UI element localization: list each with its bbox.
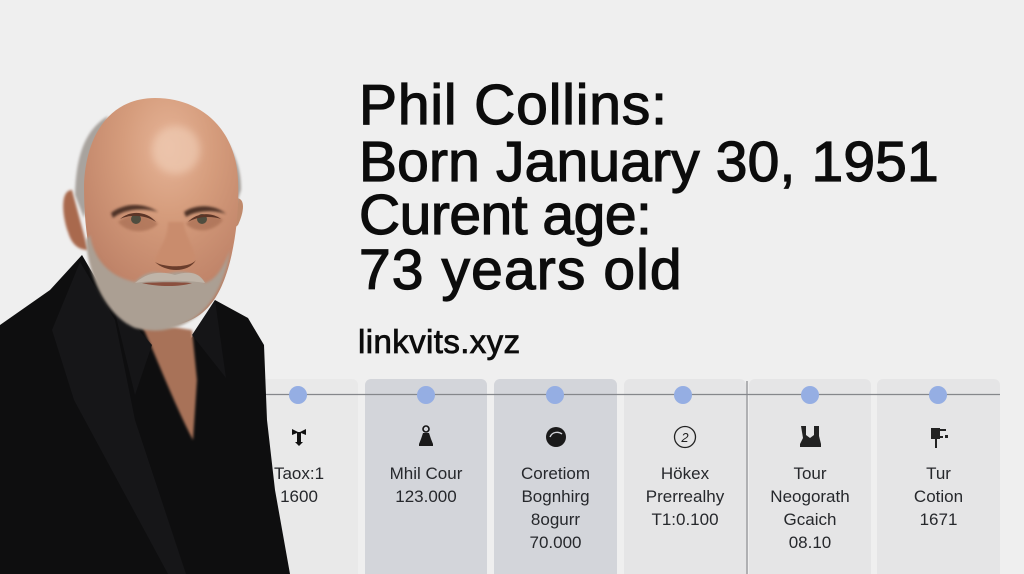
nose	[155, 222, 195, 270]
card 2 text	[390, 464, 462, 506]
nose shadow	[155, 260, 196, 270]
card 5	[749, 379, 871, 574]
card 3 text: 70.000	[530, 533, 582, 552]
eyes	[131, 214, 141, 224]
hair sides	[75, 116, 241, 218]
icon: bell figure	[419, 425, 433, 446]
card 5 text: Tour	[793, 464, 827, 483]
portrait of Phil Collins	[0, 98, 290, 574]
icon: arrows	[292, 429, 306, 446]
head	[84, 98, 238, 326]
card 6 text	[914, 464, 963, 529]
card 5 text: 08.10	[789, 533, 831, 552]
card 6 text: Tur	[926, 464, 951, 483]
card 3 text: Coretiom	[521, 464, 590, 483]
card 2	[365, 379, 487, 574]
card 4 text: Hökex	[661, 464, 709, 483]
forehead highlight	[152, 126, 200, 174]
card 1 text: 1600	[280, 487, 318, 506]
eyelids	[120, 213, 221, 222]
moustache	[135, 273, 205, 283]
card 1 text	[274, 464, 324, 506]
card 3 text: Bognhirg	[521, 487, 590, 506]
icon: circled number	[674, 426, 696, 448]
ears	[63, 190, 88, 250]
timeline panel	[274, 379, 1000, 574]
beard	[86, 235, 230, 331]
icon: flag	[931, 428, 948, 448]
card 2 text: Mhil Cour	[390, 464, 462, 483]
lapel	[52, 262, 186, 574]
card 5 text	[770, 464, 850, 552]
card 4	[624, 379, 746, 574]
card 5 text: Gcaich	[784, 510, 836, 529]
card 3 text	[521, 464, 590, 552]
card 4 text	[646, 464, 724, 529]
shirt collar	[112, 300, 226, 395]
title: Phil Collins:	[359, 73, 668, 137]
icon: round blob	[546, 427, 566, 447]
title	[359, 73, 939, 302]
icon: hands	[800, 426, 821, 447]
card 6 text: 1671	[920, 510, 957, 529]
card 3	[494, 379, 617, 574]
card 4 text: Prerrealhy	[646, 487, 724, 506]
website label: linkvits.xyz	[358, 323, 520, 360]
black jacket	[0, 255, 290, 574]
title: Curent age:	[359, 183, 651, 247]
card 3 text: 8ogurr	[531, 510, 580, 529]
title: 73 years old	[359, 238, 683, 302]
brows	[111, 205, 226, 218]
eye sockets	[118, 214, 223, 231]
card 1 text: Taox:1	[274, 464, 324, 483]
card 6	[877, 379, 1000, 574]
icon: circled number: 2	[680, 430, 689, 445]
card 5 text: Neogorath	[770, 487, 850, 506]
card 6 text: Cotion	[914, 487, 963, 506]
card 1	[240, 379, 358, 574]
card 4 text: T1:0.100	[651, 510, 719, 529]
neck and chest	[140, 322, 197, 440]
title: Born January 30, 1951	[359, 130, 939, 194]
mouth	[142, 282, 192, 286]
card 2 text: 123.000	[395, 487, 457, 506]
